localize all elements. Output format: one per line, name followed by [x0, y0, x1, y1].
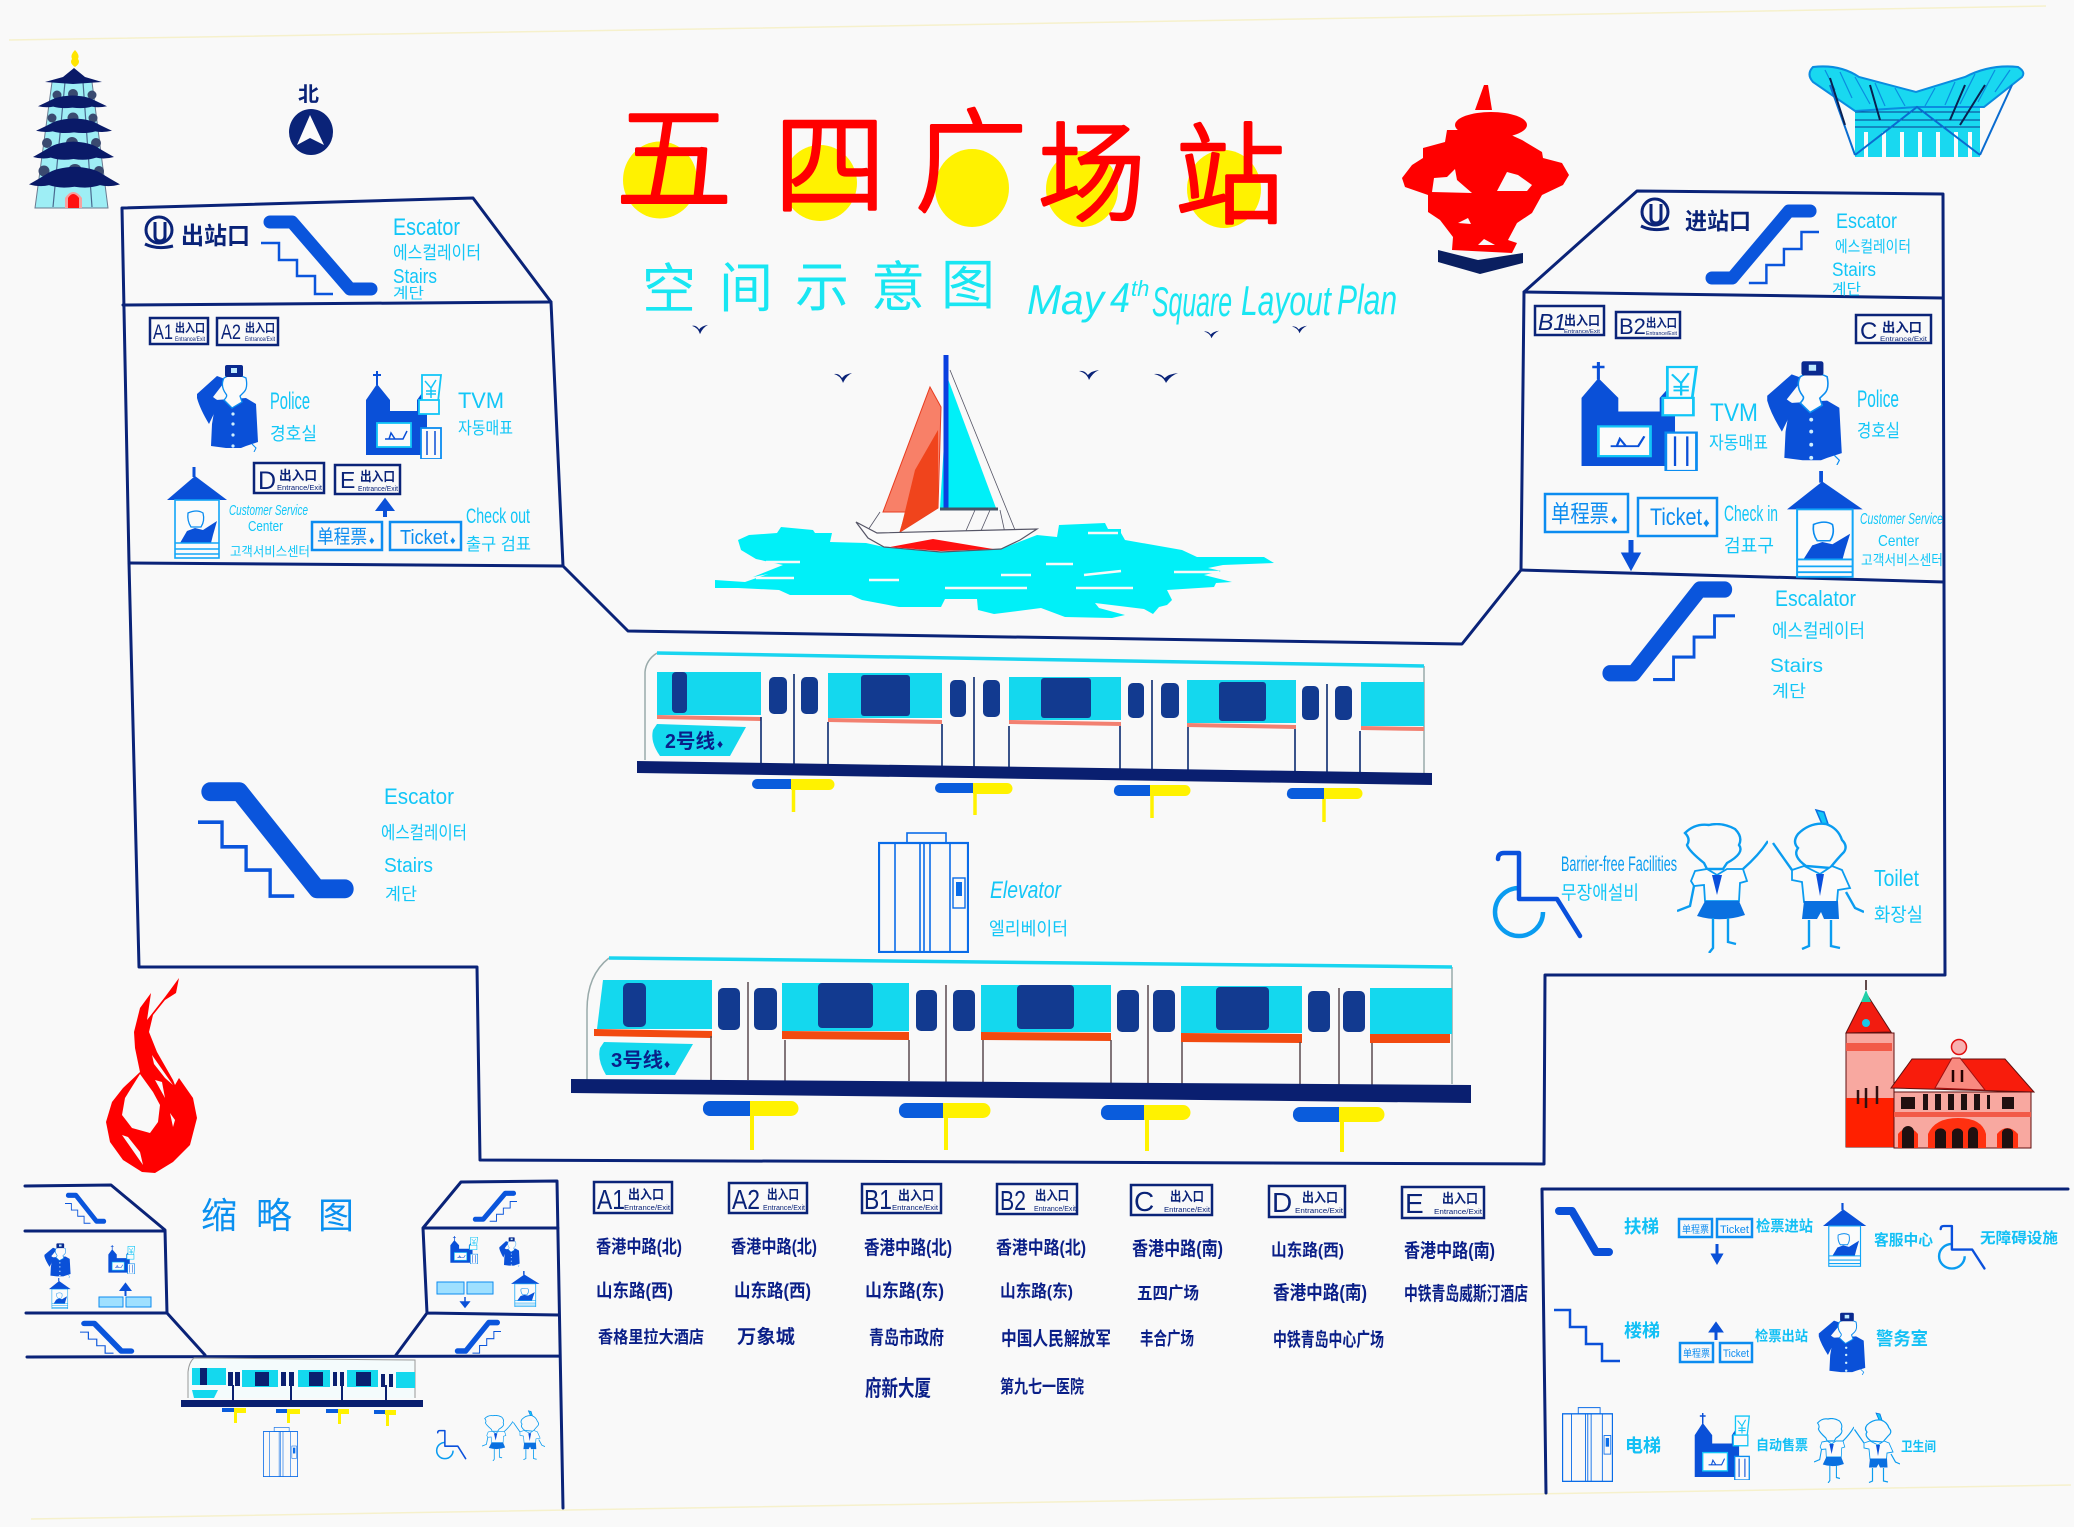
- column B2: 山东路(东): [1000, 1281, 1073, 1301]
- sign: D: 出入口: [279, 468, 317, 483]
- escalator labels: Stairs: [1832, 260, 1876, 281]
- arrow down: [1625, 540, 1637, 566]
- column B1: 青岛市政府: [869, 1326, 944, 1349]
- customer service labels: 고객서비스센터: [230, 544, 310, 559]
- toilet labels: Toilet: [1874, 865, 1920, 891]
- column E: E: [1405, 1188, 1424, 1219]
- legend: escalator: [1559, 1211, 1659, 1252]
- sign: B1: 出入口: [1564, 313, 1600, 328]
- sign: D: D: [258, 467, 276, 495]
- train: line 3: [571, 958, 1471, 1103]
- legend: stairs: [1554, 1310, 1660, 1361]
- panel: legend: [1542, 1189, 2068, 1493]
- column A2: 山东路(西): [734, 1280, 811, 1301]
- legend: exit gate: Ticket: [1723, 1348, 1749, 1360]
- legend: elevator: [1563, 1408, 1661, 1481]
- sign: B2: Entrance/Exit: [1646, 331, 1678, 337]
- column D: [1269, 1186, 1384, 1351]
- line 2 badge: ♦: [717, 737, 723, 751]
- legend: ticket machine: 自动售票: [1756, 1437, 1808, 1453]
- icon: north compass: [289, 83, 333, 155]
- title: 四: [774, 76, 886, 238]
- subtitle English: Layout: [1241, 277, 1333, 324]
- check out labels: [466, 505, 531, 554]
- check out labels: Check out: [466, 505, 530, 528]
- ticket gate boxes: ♦: [450, 535, 456, 547]
- sign: A1: [150, 318, 208, 344]
- left lower escalator labels: Stairs: [384, 855, 433, 877]
- mini boy: [513, 1411, 545, 1460]
- toilet labels: [1874, 865, 1923, 926]
- icon: ticket machine: [1582, 362, 1696, 471]
- subtitle Chinese: 意: [871, 258, 925, 318]
- sign: B2: B2: [1619, 314, 1646, 339]
- icon: ticket machine: [366, 371, 441, 459]
- sign: A2: Entrance/Exit: [245, 337, 275, 343]
- thumbnail outline: [25, 1181, 563, 1508]
- elevator labels: Elevator: [990, 877, 1062, 904]
- icon: girl toilet figure: [1677, 824, 1768, 953]
- TVM labels: TVM: [1710, 399, 1758, 427]
- subtitle Chinese: 间: [719, 259, 773, 319]
- icon: police: [197, 365, 258, 452]
- left lower escalator labels: 에스컬레이터: [381, 823, 467, 843]
- icon: pagoda landmark: [29, 50, 120, 208]
- column B2: Entrance/Exit: [1034, 1206, 1076, 1213]
- column A1: [594, 1182, 704, 1347]
- ticket gate boxes: ♦: [1703, 515, 1710, 530]
- barrier-free labels: Barrier-free Facilities: [1561, 853, 1677, 876]
- column C: 五四广场: [1137, 1284, 1199, 1303]
- rigging: [868, 370, 1015, 533]
- legend: exit gate: 单程票: [1683, 1348, 1710, 1360]
- heading: exit: 出站口: [181, 223, 250, 250]
- subtitle Chinese: 示: [795, 258, 849, 318]
- platform markers: line 3: [703, 1101, 1384, 1152]
- icon: police: [1767, 361, 1842, 465]
- icon: red brick church landmark: [1846, 980, 2034, 1148]
- icon: north compass: 北: [298, 83, 319, 106]
- title: 站: [1175, 87, 1285, 247]
- column C: Entrance/Exit: [1164, 1207, 1210, 1214]
- station floor plan outline: [122, 191, 1945, 1164]
- legend: toilet: 卫生间: [1901, 1439, 1936, 1454]
- barrier-free labels: 무장애설비: [1561, 882, 1639, 904]
- sign: C: [1856, 315, 1931, 345]
- subtitle English: 4: [1110, 274, 1130, 321]
- thumbnail heading: 略: [256, 1195, 292, 1236]
- escalator labels: 에스컬레이터: [393, 243, 481, 263]
- sign: B1: B1: [1538, 309, 1566, 335]
- divider lines: [123, 292, 1944, 582]
- sailboat illustration: [715, 355, 1274, 618]
- arrow up: [379, 501, 391, 517]
- police labels: Police: [270, 388, 310, 415]
- icon: left lower escalator: [198, 792, 345, 896]
- line 2 badge: 2号线: [665, 730, 715, 753]
- thumbnail heading: 图: [318, 1195, 354, 1236]
- legend: entry gate: [1679, 1217, 1813, 1262]
- customer service labels: Customer Service: [229, 502, 308, 519]
- column B2: 中国人民解放军: [1001, 1328, 1111, 1350]
- subtitle English: [1027, 274, 1397, 325]
- TVM labels: [1709, 399, 1768, 453]
- ticket gate boxes: 单程票: [317, 526, 367, 548]
- column A2: 香港中路(北): [731, 1237, 817, 1257]
- column B1: 出入口: [898, 1188, 934, 1203]
- column C: [1131, 1185, 1223, 1349]
- thumbnail heading: 缩: [201, 1195, 237, 1236]
- column A2: 万象城: [737, 1326, 795, 1348]
- column A1: 香港中路(北): [596, 1237, 682, 1257]
- column A1: A1: [597, 1184, 625, 1215]
- escalator labels: [1832, 210, 1911, 298]
- subtitle Chinese: 图: [941, 256, 995, 316]
- right lower escalator labels: Escalator: [1775, 586, 1856, 611]
- title: 五: [616, 66, 732, 234]
- column E: 出入口: [1442, 1191, 1478, 1206]
- sign: A1: 出入口: [175, 320, 205, 335]
- check in labels: [1724, 501, 1778, 556]
- column B1: Entrance/Exit: [892, 1205, 938, 1212]
- legend: ticket machine: [1695, 1413, 1808, 1480]
- icon: service kiosk: [1787, 471, 1863, 577]
- legend: elevator: 电梯: [1625, 1436, 1661, 1456]
- subtitle Chinese: 空: [642, 260, 696, 320]
- icon: escalator: [261, 222, 371, 294]
- customer service labels: [229, 502, 310, 559]
- title: 广: [915, 73, 1027, 235]
- icon: birds: [692, 325, 1307, 383]
- column D: Entrance/Exit: [1295, 1208, 1343, 1215]
- subtitle English: May: [1027, 276, 1107, 323]
- sign: D: [254, 463, 324, 495]
- mini platform markers: [222, 1408, 396, 1426]
- icon: red May wind sculpture: [1402, 85, 1569, 274]
- toilet labels: 화장실: [1874, 904, 1923, 926]
- column B2: 出入口: [1035, 1188, 1069, 1203]
- escalator labels: Escator: [1836, 210, 1897, 233]
- column E: [1402, 1187, 1528, 1305]
- subtitle English: Square: [1152, 278, 1232, 325]
- legend: customer service: [1823, 1203, 1933, 1266]
- mini elevator: [263, 1427, 298, 1477]
- TVM labels: TVM: [458, 388, 504, 413]
- mini train: [181, 1358, 423, 1407]
- check in labels: 검표구: [1724, 536, 1774, 556]
- sign: B2: 出入口: [1646, 315, 1677, 330]
- panel: right concourse: [1535, 306, 1943, 577]
- column A1: 山东路(西): [596, 1280, 673, 1301]
- legend: barrier free: 无障碍设施: [1980, 1229, 2058, 1247]
- police labels: 경호실: [270, 424, 317, 444]
- sign: B1: Entrance/Exit: [1564, 329, 1601, 335]
- customer service labels: Customer Service: [1860, 511, 1943, 528]
- column B1: 府新大厦: [865, 1376, 931, 1401]
- mini wheelchair: [437, 1431, 466, 1459]
- column A2: [729, 1183, 817, 1348]
- line 2 badge: [652, 724, 746, 756]
- column A2: 出入口: [767, 1187, 799, 1202]
- mast: [944, 355, 948, 510]
- right lower escalator labels: Stairs: [1770, 656, 1823, 677]
- ticket gate boxes: Ticket: [1650, 504, 1702, 531]
- escalator labels: Escator: [393, 214, 460, 241]
- sign: C: 出入口: [1882, 320, 1922, 335]
- right lower escalator labels: [1770, 586, 1865, 701]
- sign: A1: Entrance/Exit: [175, 337, 205, 343]
- column B2: 香港中路(北): [996, 1238, 1086, 1258]
- legend: toilet: [1814, 1413, 1936, 1483]
- ticket gate boxes: [1545, 494, 1717, 536]
- left lower escalator labels: [381, 784, 467, 904]
- right cyan sail: [940, 379, 996, 508]
- legend: stairs: 楼梯: [1624, 1321, 1660, 1341]
- ticket gate boxes: Ticket: [400, 527, 448, 549]
- icon: service kiosk: [167, 467, 227, 558]
- icon: escalator: [1712, 211, 1819, 283]
- column C: 出入口: [1170, 1189, 1204, 1204]
- escalator labels: Stairs: [393, 266, 437, 288]
- sign: C: Entrance/Exit: [1880, 337, 1927, 343]
- left red sail: [883, 387, 941, 532]
- legend: police: 警务室: [1876, 1328, 1928, 1349]
- ticket gate boxes: 单程票: [1551, 501, 1609, 528]
- title: [616, 66, 1285, 247]
- elevator labels: [989, 877, 1068, 939]
- ticket gate boxes: ♦: [369, 535, 375, 547]
- sign: B1: [1535, 306, 1604, 335]
- line 3 badge: 3号线: [611, 1049, 663, 1072]
- ticket gate boxes: [312, 522, 461, 550]
- barrier-free labels: [1561, 853, 1677, 904]
- sign: E: [335, 465, 400, 494]
- escalator labels: [393, 214, 481, 302]
- right lower escalator labels: 에스컬레이터: [1772, 620, 1865, 642]
- column C: C: [1134, 1186, 1154, 1217]
- logo: Qingdao Metro: [1641, 199, 1669, 230]
- panel: left exit area: [145, 214, 481, 302]
- column B1: 山东路(东): [865, 1280, 944, 1301]
- legend frame: [1542, 1189, 2068, 1493]
- sign: D: Entrance/Exit: [277, 485, 322, 492]
- subtitle English: th: [1131, 276, 1149, 301]
- column B2: B2: [1000, 1185, 1026, 1216]
- police labels: [1857, 386, 1900, 441]
- line 3 badge: [599, 1042, 693, 1075]
- column C: 丰合广场: [1140, 1328, 1194, 1349]
- customer service labels: Center: [1878, 533, 1920, 550]
- icon: right lower escalator: [1610, 590, 1735, 680]
- subtitle Chinese: [642, 256, 995, 320]
- column A1: 出入口: [628, 1187, 664, 1202]
- panel: left concourse: [150, 318, 531, 559]
- legend: exit gate: 检票出站: [1755, 1328, 1808, 1344]
- train: line 2: [637, 653, 1432, 785]
- thumbnail heading: [201, 1195, 354, 1236]
- legend: entry gate: 单程票: [1682, 1224, 1709, 1236]
- elevator labels: 엘리베이터: [989, 919, 1068, 939]
- sign: C: C: [1860, 318, 1877, 345]
- hull: [856, 522, 1037, 552]
- column E: Entrance/Exit: [1434, 1209, 1482, 1216]
- column A1: 香格里拉大酒店: [598, 1327, 704, 1347]
- TVM labels: [458, 388, 513, 438]
- mini girl: [482, 1415, 513, 1461]
- line 3 badge: ♦: [664, 1057, 670, 1071]
- check in labels: Check in: [1724, 501, 1778, 526]
- column D: D: [1272, 1187, 1292, 1218]
- column E: 香港中路(南): [1404, 1240, 1495, 1262]
- police labels: Police: [1857, 386, 1899, 413]
- TVM labels: 자동매표: [458, 419, 513, 438]
- check out labels: 출구 검표: [466, 535, 531, 554]
- sign: A2: 出入口: [245, 320, 275, 335]
- right lower escalator labels: 계단: [1772, 682, 1806, 701]
- logo: Qingdao Metro: [145, 217, 173, 248]
- sign: E: 出入口: [360, 469, 395, 484]
- left lower escalator labels: Escator: [384, 784, 454, 809]
- legend: escalator: 扶梯: [1624, 1217, 1659, 1237]
- sign: B2: [1616, 312, 1680, 339]
- sign: A1: A1: [153, 321, 173, 344]
- title: 场: [1038, 88, 1146, 244]
- mini icons: [44, 1193, 540, 1353]
- column B1: [862, 1184, 952, 1401]
- column D: 出入口: [1302, 1190, 1338, 1205]
- legend: police: [1819, 1313, 1928, 1375]
- legend: entry gate: 检票进站: [1756, 1217, 1813, 1235]
- escalator labels: 계단: [393, 285, 424, 302]
- legend: barrier free: [1939, 1226, 2058, 1268]
- heading: entrance: 进站口: [1685, 208, 1751, 234]
- icon: red flame sculpture: [106, 978, 197, 1173]
- sign: E: E: [340, 467, 355, 493]
- icon: wheelchair: [1495, 853, 1580, 936]
- subtitle English: Plan: [1337, 276, 1397, 323]
- police labels: [270, 388, 317, 444]
- panel: exit directory: [594, 1182, 1528, 1401]
- police labels: 경호실: [1857, 421, 1900, 441]
- icon: theatre landmark: [1810, 66, 2023, 157]
- ticket gate boxes: ♦: [1611, 512, 1618, 527]
- column B1: 香港中路(北): [864, 1237, 952, 1259]
- TVM labels: 자동매표: [1709, 433, 1768, 453]
- icon: boy toilet figure: [1773, 810, 1864, 949]
- column D: 山东路(西): [1271, 1240, 1344, 1260]
- customer service labels: [1860, 511, 1943, 568]
- column A1: Entrance/Exit: [624, 1205, 670, 1212]
- panel: right entrance area: [1641, 199, 1911, 298]
- column B2: [996, 1184, 1111, 1397]
- column E: 中铁青岛威斯汀酒店: [1404, 1283, 1528, 1305]
- escalator labels: 에스컬레이터: [1835, 238, 1911, 256]
- left lower escalator labels: 계단: [385, 885, 417, 904]
- customer service labels: Center: [248, 518, 283, 535]
- platform markers: line 2: [752, 779, 1362, 822]
- column A2: A2: [732, 1184, 760, 1215]
- column C: 香港中路(南): [1132, 1238, 1223, 1260]
- icon: elevator: [879, 833, 968, 952]
- legend: exit gate: [1680, 1324, 1808, 1362]
- sign: A2: A2: [221, 321, 241, 344]
- sign: E: Entrance/Exit: [358, 486, 398, 493]
- legend: customer service: 客服中心: [1874, 1231, 1933, 1249]
- column D: 香港中路(南): [1273, 1282, 1367, 1304]
- escalator labels: 계단: [1832, 281, 1861, 298]
- legend: entry gate: Ticket: [1720, 1224, 1749, 1236]
- panel: thumbnail map: [25, 1181, 563, 1508]
- column B1: B1: [864, 1184, 892, 1215]
- sign: A2: [217, 318, 278, 345]
- water: [715, 523, 1274, 618]
- customer service labels: 고객서비스센터: [1861, 552, 1943, 568]
- column B2: 第九七一医院: [1000, 1376, 1084, 1397]
- column D: 中铁青岛中心广场: [1273, 1329, 1384, 1351]
- column A2: Entrance/Exit: [763, 1205, 805, 1212]
